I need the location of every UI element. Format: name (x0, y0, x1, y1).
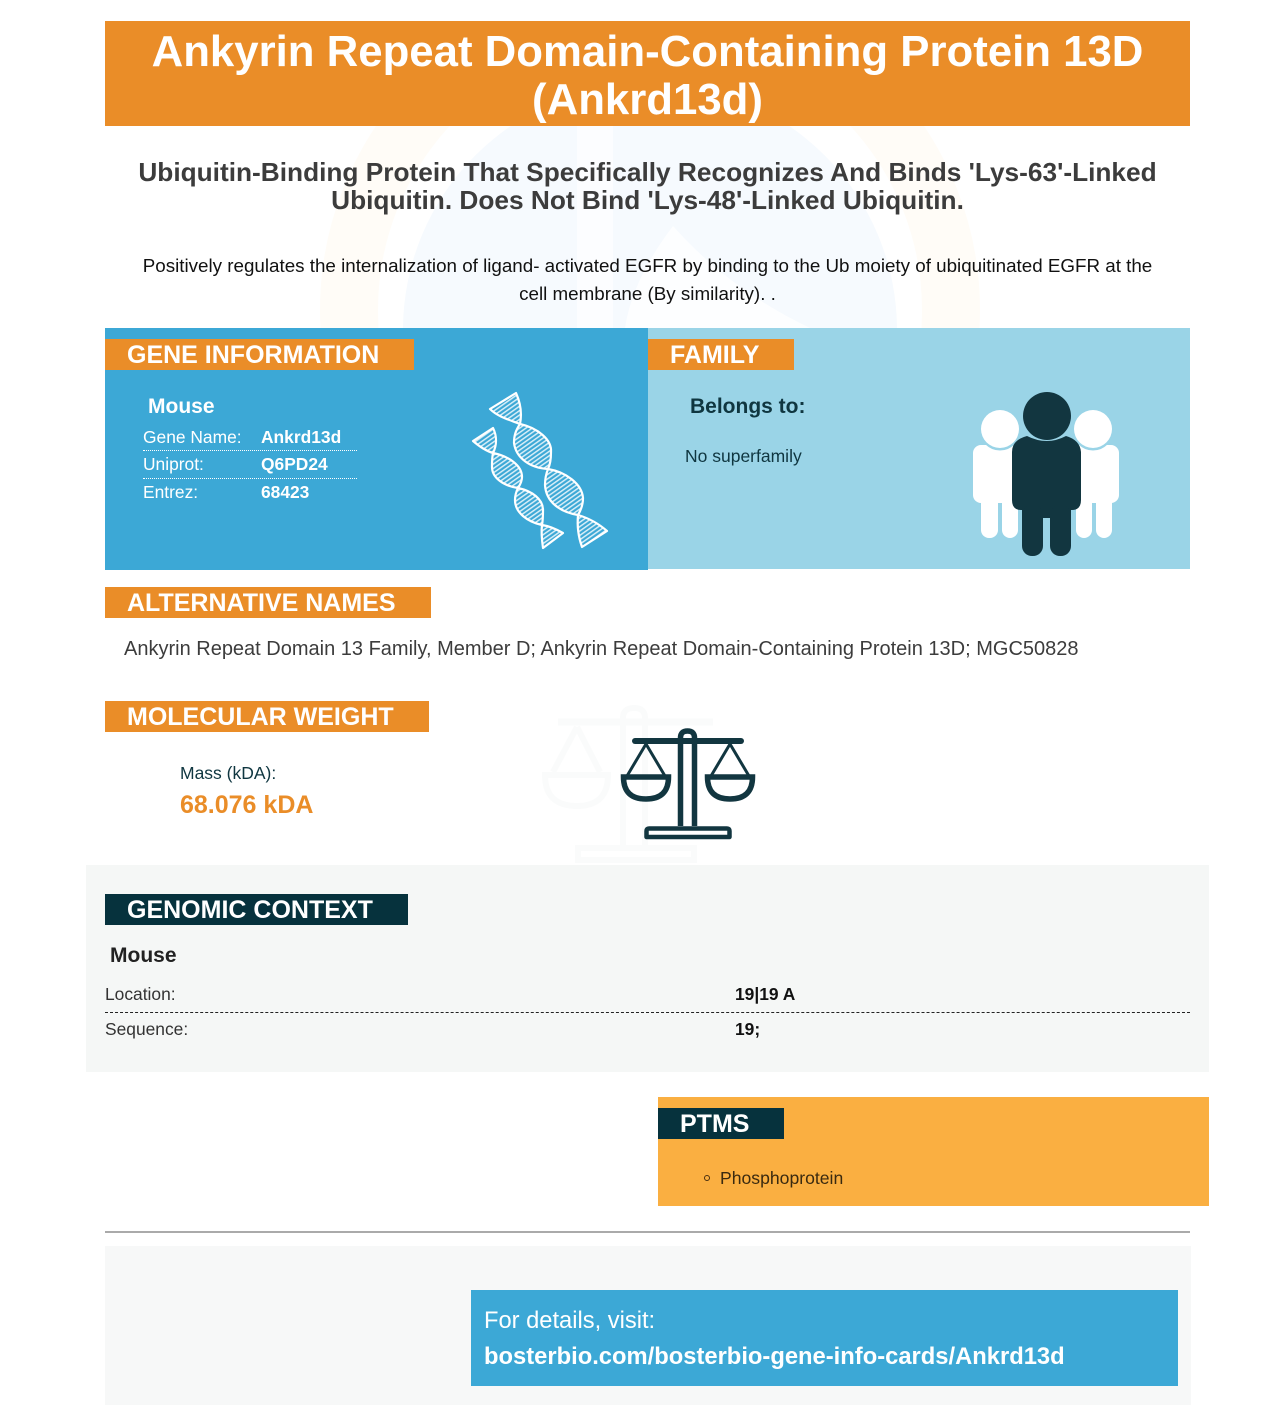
title banner: (Ankrd13d) (532, 75, 763, 124)
title banner: Ankyrin Repeat Domain-Containing Protein 13D (152, 27, 1143, 76)
description (143, 255, 1152, 304)
subtitle: Ubiquitin-Binding Protein That Specifically Recognizes And Binds 'Lys-63'-Linked (138, 157, 1157, 187)
location row: Location: (105, 984, 176, 1004)
family value: No superfamily (685, 446, 802, 466)
gene name row (143, 423, 357, 451)
bullet marker (704, 1175, 710, 1181)
panel: footer (105, 1246, 1191, 1405)
entrez row (143, 482, 309, 502)
sequence row: 19; (735, 1019, 760, 1039)
panel: family (648, 328, 1190, 569)
mass label: Mass (kDA): (180, 763, 276, 783)
entrez row: Entrez: (143, 482, 198, 502)
heading: molecular weight: MOLECULAR WEIGHT (127, 703, 394, 731)
uniprot row (143, 451, 357, 479)
uniprot row: Q6PD24 (261, 454, 328, 474)
location row: 19|19 A (735, 984, 795, 1004)
visit URL: bosterbio.com/bosterbio-gene-info-cards/Ankrd13d (484, 1343, 1065, 1370)
heading: alternative names: ALTERNATIVE NAMES (127, 589, 396, 617)
mass value: 68.076 kDA (180, 791, 313, 819)
heading: gene information: GENE INFORMATION (127, 341, 379, 369)
species label: Mouse (148, 395, 215, 418)
heading: family (648, 339, 794, 370)
call to action box (471, 1290, 1178, 1386)
entrez row: 68423 (261, 482, 309, 502)
panel: genomic context (86, 865, 1209, 1072)
location row (105, 978, 1190, 1013)
uniprot row: Uniprot: (143, 454, 204, 474)
sequence row: Sequence: (105, 1019, 188, 1039)
heading: PTMs (658, 1108, 784, 1139)
heading: family: FAMILY (670, 341, 759, 369)
heading: genomic context: GENOMIC CONTEXT (127, 896, 373, 924)
panel: gene information (105, 328, 648, 570)
watermark background logo (403, 126, 897, 328)
subtitle: Ubiquitin. Does Not Bind 'Lys-48'-Linked Ubiquitin. (331, 185, 964, 215)
description: cell membrane (By similarity). . (519, 283, 776, 304)
belongs to label: Belongs to: (690, 395, 806, 418)
alternative names text: Ankyrin Repeat Domain 13 Family, Member D; Ankyrin Repeat Domain-Containing Protein 13D; MGC50828 (124, 638, 1079, 660)
panel: PTMs (658, 1097, 1209, 1206)
species label: Mouse (110, 944, 177, 967)
description: Positively regulates the internalization of ligand- activated EGFR by binding to the Ub moiety of ubiquitinated EGFR at the (143, 255, 1152, 276)
gene name row: Ankrd13d (261, 427, 341, 447)
subtitle (138, 157, 1157, 215)
visit label: For details, visit: (484, 1308, 655, 1334)
gene name row: Gene Name: (143, 427, 242, 447)
PTM item: Phosphoprotein (720, 1168, 843, 1188)
title banner (105, 21, 1190, 126)
heading: PTMs: PTMS (680, 1110, 749, 1138)
sequence row (105, 1019, 760, 1039)
divider (105, 1231, 1190, 1233)
